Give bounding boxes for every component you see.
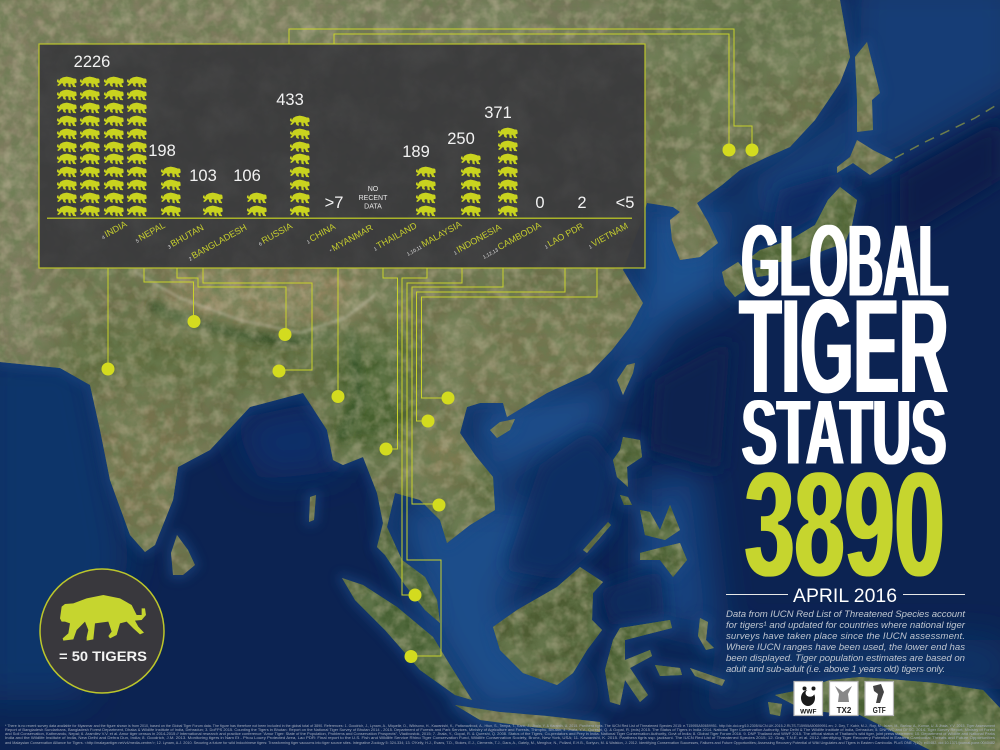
description text: surveys have taken place since the IUCN assessment. — [726, 631, 965, 642]
country labels: 1 LAO PDR — [542, 221, 586, 251]
no recent data note: NO — [368, 186, 379, 193]
tiger icon bars — [57, 77, 517, 216]
population numbers: 0 — [535, 194, 545, 212]
footnotes and references: Report of Bangladesh Sundarbans, Bangladesh Forest Department, Dhaka & Wildlife Institute of India, Dehradun; 3. DoFPS 2015. Counting the Tigers in Bhutan: Report on the National Tiger Survey of Bhutan 2014 - 2015. Department of Forests and Park Services, Ministry of Agriculture and Forests, Thimphu, Bhutan; 4. Jhala, Y.V., Qureshi, Q. & Gopal, R. (eds) 2015. The Status of Tigers in India 2014. National Tiger Conservation Authority, New Delhi & The Wildlife Institute of India, Dehradun; 5. DNPWC and DFSC. 2014. Tiger Survey Report, Ministry of Forest — [5, 728, 995, 732]
icon: tiger — [60, 595, 146, 641]
tiger count panel — [39, 44, 645, 268]
population numbers: 2 — [577, 194, 587, 212]
country labels: 1,10,11 MALAYSIA — [404, 219, 463, 258]
population numbers: 2226 — [74, 53, 110, 71]
country labels: 1 THAILAND — [371, 220, 419, 253]
kuril islands — [895, 103, 1000, 158]
logo: TX2: TX2 — [837, 706, 852, 715]
country labels — [99, 219, 630, 263]
legend: one icon equals 50 tigers — [40, 569, 164, 693]
footnotes and references: * There is no recent survey data available for Myanmar and the figure shown is from 2010, based on the Global Tiger Forum data. The figure has therefore not been included in the global total of 3890. References: 1. Goodrich, J., Lynam, A., Miquelle, D., Wibisono, H., Kawanishi, K., Pattanavibool, A., Htun, S., Tempa, T., Karki, J., Jhala, Y. & Karanth, U. 2015. Panthera tigris. The IUCN Red List of Threatened Species 2015: e.T15955A50659951. http://dx.doi.org/10.2305/IUCN.UK.2015-2.RLTS.T15955A50659951.en; 2. Dey, T. Kabir, M.J., Roy, M., Islam, M., Barlow, A., Kumar, U. & Jhala, Y.V. 2015. Tiger Assessment — [5, 724, 995, 728]
no recent data note: RECENT — [359, 195, 388, 202]
country labels: 1 INDONESIA — [451, 222, 503, 257]
logo: GTF: GTF — [873, 706, 886, 715]
no recent data note — [359, 186, 388, 210]
description text: Data from IUCN Red List of Threatened Species account — [726, 609, 965, 620]
population numbers: 433 — [276, 91, 304, 109]
logos — [794, 682, 894, 716]
bar: Nepal — [161, 167, 180, 216]
population numbers: 198 — [148, 142, 176, 160]
population numbers: <5 — [616, 194, 634, 212]
no recent data note: DATA — [364, 204, 382, 210]
country labels: 4 INDIA — [99, 219, 129, 241]
location dots — [102, 144, 758, 663]
footnotes and references — [5, 724, 995, 745]
bar: Bangladesh — [247, 193, 266, 216]
population numbers: 250 — [447, 130, 475, 148]
bar: Bhutan — [203, 193, 222, 216]
description text: been displayed. Tiger population estimates are based on — [726, 653, 965, 664]
footnotes and references: and Malaysian Conservation Alliance for Tigers. <http://malayantiger.net/v4/media-centre/>; 12. Lynam, A.J. 2010. Securing a future for wild Indochinese tigers: Transforming tiger vacuums into tiger source sites. Integrative Zoology 5: 324-334; 13. O'Kelly, H.J., Evans, T.D., Stokes, E.J., Clements, T.J., Dara, A., Gately, M., Menghor, N., Pollard, E.H.B., Soriyun, M. & Walston, J. 2012. Identifying Conservation Successes, Failures and Future Opportunities; Assessing Recovery Potential of Wild Ungulates and Tigers in Eastern Cambodia. PLoS ONE 7(10): e40482. doi:10.1371/journal.pone.0040482 — [5, 741, 995, 745]
country labels: 2 BANGLADESH — [186, 222, 248, 263]
footnotes and references: India and the Wildlife Institute of India, New Delhi and Dehra Dun, India; 8. Goodrich, J.M. 2013. Monitoring tigers in Nam Et - Phou Louey Protected Area, Lao PDR: Final report to the U.S. Fish and Wildlife Service Rhino Tiger Conservation Fund, Wildlife Conservation Society, Bronx, New York, USA; 11. Kawanishi, K. 2015. Panthera tigris ssp. jacksoni. The IUCN Red List of Threatened Species 2015; 12. Gray, T.N.E. et al. 2012. Identifying Tiger Recovery Potential in Eastern Cambodia: Threats and Future Opportunities — [5, 736, 995, 740]
bar: India — [57, 77, 146, 216]
population numbers: >7 — [325, 194, 343, 212]
footnotes and references: and Soil Conservation, Kathmandu, Nepal; 6. Aramilev V.V. et al. Amur tiger census in 2014-2015 // International research and practice conference "Amur Tiger: State of the Population, Problems and Conservation Prospects". Vladivostok, 2015; 7. Jhala, Y., Gopal, R. & Qureshi, Q. 2008. Status of the Tigers, Co-predators and Prey in India. National Tiger Conservation Authority, Govt of India; 8. Global Tiger Forum 2016. 9. DNP Thailand and WWF 2015. The official status of Thailand's wild tiger, joint press statement; 10. Department of Wildlife and National Parks — [5, 732, 995, 736]
bar: Thailand — [416, 167, 435, 216]
description text — [726, 609, 966, 675]
country labels: 3 BHUTAN — [165, 222, 205, 251]
bar: Russia — [290, 116, 309, 216]
population numbers: 189 — [402, 143, 430, 161]
baseline — [47, 218, 632, 219]
population numbers: 371 — [484, 104, 512, 122]
bar: Indonesia — [498, 128, 517, 216]
date heading: APRIL 2016 — [793, 585, 897, 607]
country labels: 1 CHINA — [304, 221, 337, 246]
country labels: * MYANMAR — [327, 222, 375, 255]
description text: Where IUCN ranges have been used, the lower end has — [726, 642, 965, 653]
country labels: 5 NEPAL — [133, 220, 167, 245]
population numbers: 103 — [189, 167, 217, 185]
title — [740, 204, 948, 484]
logo: WWF: WWF — [800, 708, 816, 716]
population numbers — [74, 53, 634, 212]
bar: Malaysia — [461, 154, 480, 216]
description text: for tigers¹ and updated for countries where national tiger — [726, 620, 966, 631]
country labels: 1 VIETNAM — [586, 221, 630, 251]
description text: adult and sub-adult (i.e. above 1 years old) tigers only. — [726, 664, 945, 675]
population numbers: 106 — [233, 167, 261, 185]
country labels: 1,12,13 CAMBODIA — [480, 220, 543, 261]
panel background — [39, 44, 645, 268]
legend label: = 50 TIGERS — [59, 648, 147, 664]
country labels: 6 RUSSIA — [256, 221, 294, 248]
leader lines to country locations — [108, 29, 752, 656]
